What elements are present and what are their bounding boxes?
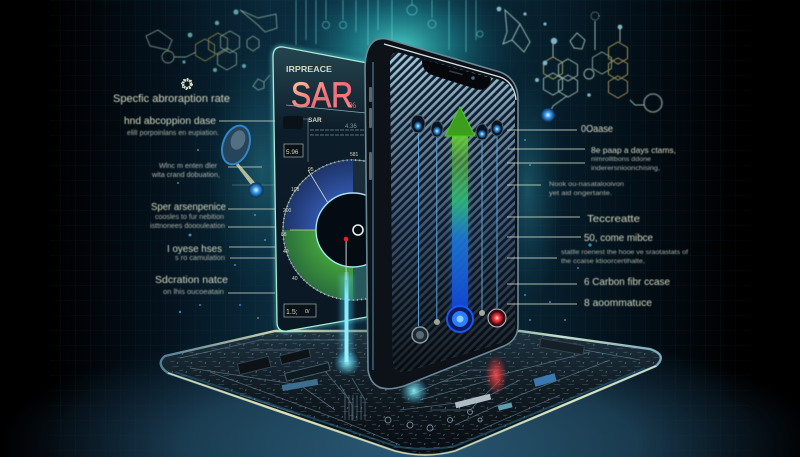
block: doses: s ro camulation: [175, 255, 225, 262]
arrow head: [445, 107, 475, 136]
callout lines right: [507, 130, 585, 304]
block: state: [561, 249, 688, 265]
block: doses: [167, 243, 225, 262]
block: experience: Sper arsenpenice: [151, 201, 226, 213]
label: carbon fibre case: 6 Carbon fibr ccase: [584, 276, 670, 288]
block: days: 8e paap a days ctams,: [591, 145, 676, 155]
block: absorption dose: hnd abcoppion dase: [124, 115, 216, 127]
pin lines: [418, 130, 497, 326]
block: experience: [150, 201, 226, 230]
molecule: top right: [497, 7, 662, 114]
label: technique: Teccreatte: [587, 213, 640, 225]
arrow shaft: [450, 135, 470, 320]
block: experience: isttnonees dooouleation: [150, 223, 225, 230]
gauge dial: 40: [292, 276, 298, 282]
label: performance: 8 aoommatuce: [584, 297, 652, 309]
value box bottom: 0/: [305, 309, 310, 315]
value box bottom: [284, 304, 316, 317]
value box bottom: 1.5;: [286, 309, 298, 316]
small pale bulb 2: [479, 310, 485, 316]
SAR sublabel: SAR: [308, 117, 322, 124]
sparkle particles: [177, 139, 592, 321]
block: state: statlle roenest the hooe ve sraotastats of: [561, 249, 688, 256]
block: days: inderersnioonchising,: [591, 165, 660, 172]
left text column: [113, 93, 230, 296]
blue thermometer bulb: [447, 306, 473, 332]
blue sparkle: [400, 380, 428, 404]
SAR value: 4.36: [345, 124, 357, 130]
right text column: [549, 124, 688, 309]
block: note: [151, 163, 220, 179]
block: note: Nook ou-nasatalooivon: [549, 181, 624, 188]
gauge dial: 200: [283, 208, 292, 214]
gauge dial: 108: [291, 187, 300, 193]
blue molecule ball: [541, 108, 555, 122]
gauge dial: [281, 152, 366, 301]
magnifier icon with ball: [217, 122, 264, 198]
header label: IRPREACE: [286, 65, 333, 74]
block: absorption dose: elilI porpoinlans en eupiation.: [127, 130, 219, 137]
block: duration: on lhis oucoeatain: [163, 289, 224, 296]
molecule: top left: [146, 9, 277, 90]
percent sign: %: [349, 101, 356, 110]
block: experience: coosles to fur nebition: [155, 214, 224, 221]
label: fifty: 50, come mibce: [584, 232, 653, 244]
block: doses: I oyese hses: [167, 243, 222, 255]
block: days: [591, 145, 676, 172]
phone body: [365, 39, 520, 389]
pin caps: [411, 115, 503, 140]
energy beam: [334, 237, 360, 376]
SAR title: SAR: [291, 76, 353, 115]
gauge dial: 88: [281, 232, 287, 238]
vertical light streaks and rings: [296, 0, 483, 52]
dark sensor chip: [283, 116, 303, 129]
carbon fibre back: [390, 52, 515, 372]
gauge dial: 40: [283, 249, 289, 255]
grey bulb: [412, 327, 428, 343]
block: days: nimrolltbons ddone: [591, 156, 651, 163]
red reflection: [485, 355, 507, 395]
block: duration: Sdcration natce: [155, 274, 228, 286]
side buttons: [369, 87, 372, 180]
block: note: [549, 181, 624, 197]
SAR display panel: [268, 42, 367, 336]
block: note: yet aid ongertante.: [549, 190, 612, 197]
circuit board platform: [150, 325, 670, 457]
block: note: Wlnc m enten dler: [159, 163, 218, 170]
value box top: 5.96: [286, 149, 299, 156]
label: decrease: 0Oaase: [581, 124, 613, 135]
circuit traces: [180, 340, 640, 445]
icon: gear: [182, 79, 192, 89]
notch: [422, 59, 491, 90]
small pale bulb: [434, 319, 440, 325]
block: duration: [155, 274, 228, 296]
gauge dial: 95: [308, 167, 314, 173]
chips: [237, 356, 271, 375]
block: note: wita crand dobuation,: [151, 172, 220, 179]
red thermometer bulb: [488, 309, 506, 327]
value box top: [284, 144, 303, 157]
block: absorption dose: [124, 115, 219, 137]
heading: specific absorption rate: Specfic abroraption rate: [113, 93, 230, 105]
callout lines left: [219, 121, 275, 293]
gauge dial: 581: [350, 152, 359, 158]
block: state: the ccaise ktioorcertihalte,: [561, 258, 645, 265]
